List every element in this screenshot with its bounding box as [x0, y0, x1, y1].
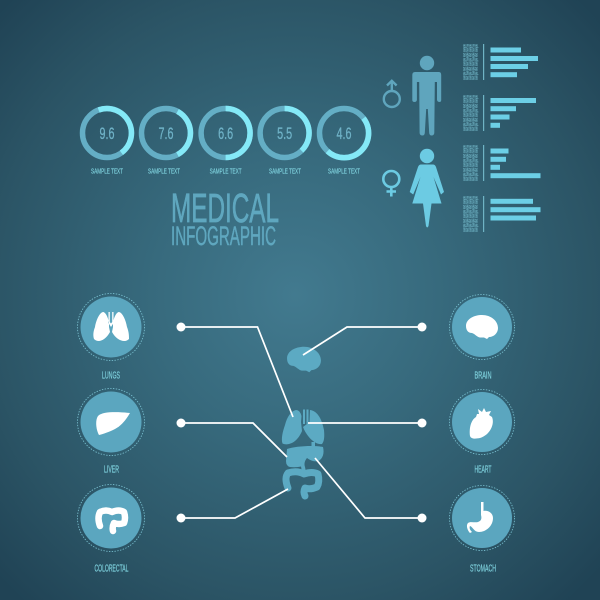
bar chart group 3: sample text sample text sample: [474, 145, 478, 181]
ring chart row: [82, 108, 369, 176]
badge: heart: [450, 390, 514, 476]
badge: colorectal: [78, 484, 144, 574]
line: colorectal: [176, 489, 288, 522]
bar chart group 3: text sample text sample text sa: [472, 145, 476, 181]
ring 7.6: 7.6: [158, 125, 174, 143]
icon: heart: [470, 408, 493, 439]
icon: stomach: [467, 502, 493, 533]
ring 6.6: [201, 108, 250, 176]
bar chart group 1: sample text sample text sample: [474, 44, 478, 80]
ring 4.6: 4.6: [336, 125, 352, 143]
ring 5.5: SAMPLE TEXT: [269, 168, 301, 176]
line: stomach: [315, 458, 426, 522]
line: lungs: [176, 322, 293, 417]
bar chart group 3: text sample text sample text sa: [466, 145, 470, 181]
icon: brain: [466, 315, 498, 339]
badge: lungs: [78, 294, 144, 382]
bar chart group 2: sample text sample text sample: [474, 95, 478, 131]
bar chart group 3: sample text sample text sample: [468, 145, 472, 181]
organ: brain: [287, 347, 321, 372]
icon: male figure: [412, 56, 441, 135]
bar chart group 2: [462, 95, 536, 131]
badge: lungs: LUNGS: [102, 370, 120, 382]
icon: colorectal: [98, 510, 125, 531]
bar chart group 4: sample text sample text sample: [462, 196, 466, 232]
icon: male symbol: [384, 81, 400, 107]
ring 5.5: 5.5: [277, 125, 292, 143]
title: INFOGRAPHIC: [171, 221, 276, 251]
line: heart: [308, 418, 426, 428]
badge: brain: [450, 294, 514, 382]
bar chart group 4: [462, 196, 540, 232]
ring 4.6: [320, 108, 369, 176]
line: brain: [303, 322, 426, 355]
bar chart group 3: sample text sample text sample: [462, 145, 466, 181]
organ: liver and stomach: [286, 446, 324, 472]
ring 5.5: [260, 108, 309, 176]
bar chart group 1: [462, 44, 538, 80]
title: MEDICAL: [171, 185, 279, 231]
bar chart group 2: sample text sample text sample: [462, 95, 466, 131]
icon: female figure: [410, 149, 444, 228]
bar chart group 1: sample text sample text sample: [468, 44, 472, 80]
badge: liver: LIVER: [104, 464, 119, 476]
badge: liver: [78, 388, 144, 476]
bar chart group 3: [462, 145, 540, 181]
ring 4.6: SAMPLE TEXT: [328, 168, 360, 176]
bar chart group 2: sample text sample text sample: [468, 95, 472, 131]
ring 9.6: [82, 108, 132, 176]
bar chart group 4: sample text sample text sample: [468, 196, 472, 232]
bar chart group 1: sample text sample text sample: [462, 44, 466, 80]
bar chart group 1: text sample text sample text sa: [466, 44, 470, 80]
badge: colorectal: COLORECTAL: [94, 564, 129, 574]
organ: colorectal: [286, 472, 319, 496]
ring 7.6: SAMPLE TEXT: [148, 168, 180, 176]
bar chart group 2: text sample text sample text sa: [472, 95, 476, 131]
icon: lungs: [93, 312, 129, 341]
badge: stomach: [450, 486, 514, 574]
bar chart group 4: text sample text sample text sa: [472, 196, 476, 232]
ring 9.6: SAMPLE TEXT: [91, 168, 123, 176]
title: [171, 185, 279, 251]
central body organs: [282, 347, 324, 496]
icon: female symbol: [383, 171, 399, 196]
bar chart group 4: sample text sample text sample: [474, 196, 478, 232]
line: liver: [176, 418, 287, 457]
ring 6.6: SAMPLE TEXT: [210, 168, 242, 176]
connector lines: [176, 322, 426, 522]
badge: heart: HEART: [474, 464, 492, 476]
bar chart group 2: text sample text sample text sa: [466, 95, 470, 131]
bar chart group 1: text sample text sample text sa: [472, 44, 476, 80]
bar chart group 4: text sample text sample text sa: [466, 196, 470, 232]
ring 6.6: 6.6: [218, 125, 233, 143]
badge: brain: BRAIN: [474, 370, 492, 382]
organ: lungs: [282, 410, 324, 448]
badge: stomach: STOMACH: [470, 564, 496, 574]
ring 9.6: 9.6: [100, 125, 114, 143]
icon: liver: [96, 412, 130, 435]
ring 7.6: [142, 108, 190, 176]
